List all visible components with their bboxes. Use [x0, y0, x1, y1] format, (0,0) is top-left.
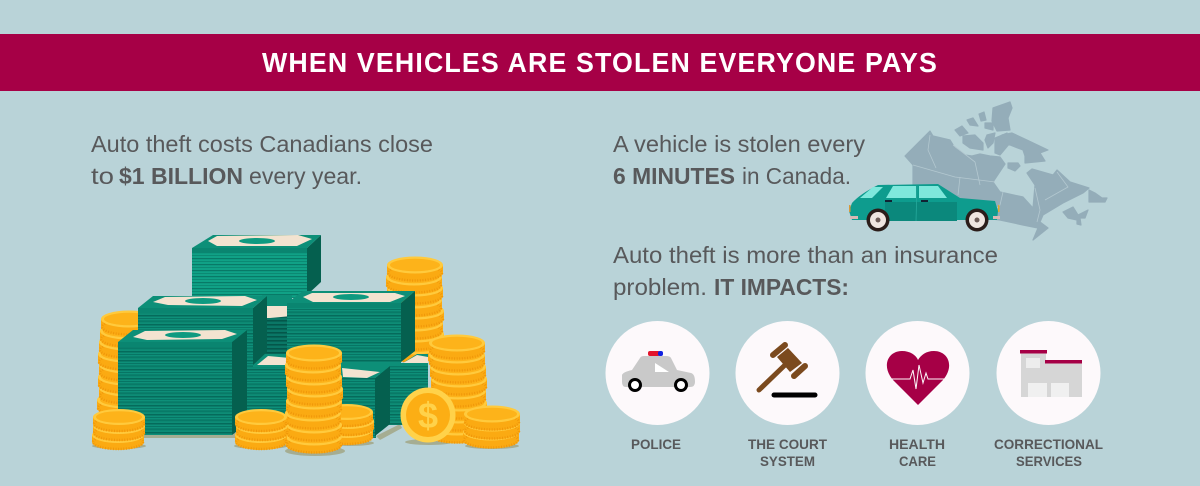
- big dollar coin: $: [418, 395, 438, 436]
- text block: theft frequency: in Canada.: [742, 163, 851, 189]
- label: SERVICES: [1016, 453, 1082, 469]
- coin stack: small center left: [235, 409, 288, 450]
- impact: the court system: [736, 321, 840, 469]
- coin stack: right front: [429, 334, 487, 444]
- text block: cost of auto theft: [91, 131, 433, 189]
- map of Canada: [905, 102, 1107, 240]
- bill stack: top: [192, 235, 321, 298]
- title: WHEN VEHICLES ARE STOLEN EVERYONE PAYS: [262, 47, 938, 78]
- icon: gavel: [759, 345, 815, 395]
- icon: teal car: [849, 184, 1000, 232]
- text block: more than insurance: [613, 242, 998, 300]
- car wheels: [866, 208, 988, 232]
- big dollar coin: [400, 388, 456, 442]
- label: HEALTH: [889, 436, 945, 452]
- label: THE COURT: [748, 436, 827, 452]
- label: [748, 436, 827, 469]
- text block: cost of auto theft: Auto theft costs Canadians close: [91, 131, 433, 157]
- text block: theft frequency: A vehicle is stolen every: [613, 131, 866, 157]
- bill stack: center front: [330, 366, 390, 438]
- bill stack: lower right: [340, 354, 428, 425]
- bill stack: middle back: [262, 295, 292, 356]
- impact: health care: [866, 321, 970, 469]
- text block: theft frequency: [613, 131, 866, 189]
- text block: more than insurance: Auto theft is more than an insurance: [613, 242, 998, 268]
- bill stack: front left: [118, 330, 247, 435]
- label: [889, 436, 945, 469]
- impact: correctional services: [994, 321, 1103, 469]
- coin stack: back right: [386, 256, 444, 362]
- icon: police car: [622, 351, 695, 390]
- text block: theft frequency: 6 MINUTES: [613, 163, 735, 189]
- text block: cost of auto theft: to: [91, 163, 114, 189]
- text block: more than insurance: problem.: [613, 274, 707, 300]
- coin stack: back left: [97, 310, 157, 416]
- coin stack: bottom left: [92, 409, 145, 450]
- coin stack: center front: [285, 344, 343, 454]
- car windows: [860, 186, 947, 198]
- title banner: [0, 34, 1200, 91]
- label: [994, 436, 1103, 469]
- label: POLICE: [631, 436, 681, 452]
- icon: building: [1020, 350, 1082, 397]
- text block: cost of auto theft: $1 BILLION: [119, 163, 243, 189]
- bill stack: left middle: [138, 296, 267, 368]
- bill stack: lower middle: [247, 354, 292, 425]
- label: CORRECTIONAL: [994, 436, 1103, 452]
- illustration: money pile: [92, 235, 520, 456]
- text block: more than insurance: IT IMPACTS:: [714, 274, 849, 300]
- label: CARE: [899, 453, 936, 469]
- ground shadow: [92, 424, 519, 456]
- impact: police: [606, 321, 710, 452]
- coin stack: bottom right: [463, 406, 520, 448]
- coin stack: small center right: [321, 404, 374, 445]
- icon: heart with pulse: [887, 351, 949, 405]
- label: SYSTEM: [760, 453, 815, 469]
- text block: cost of auto theft: every year.: [249, 163, 362, 189]
- bill stack: right middle: [287, 291, 415, 363]
